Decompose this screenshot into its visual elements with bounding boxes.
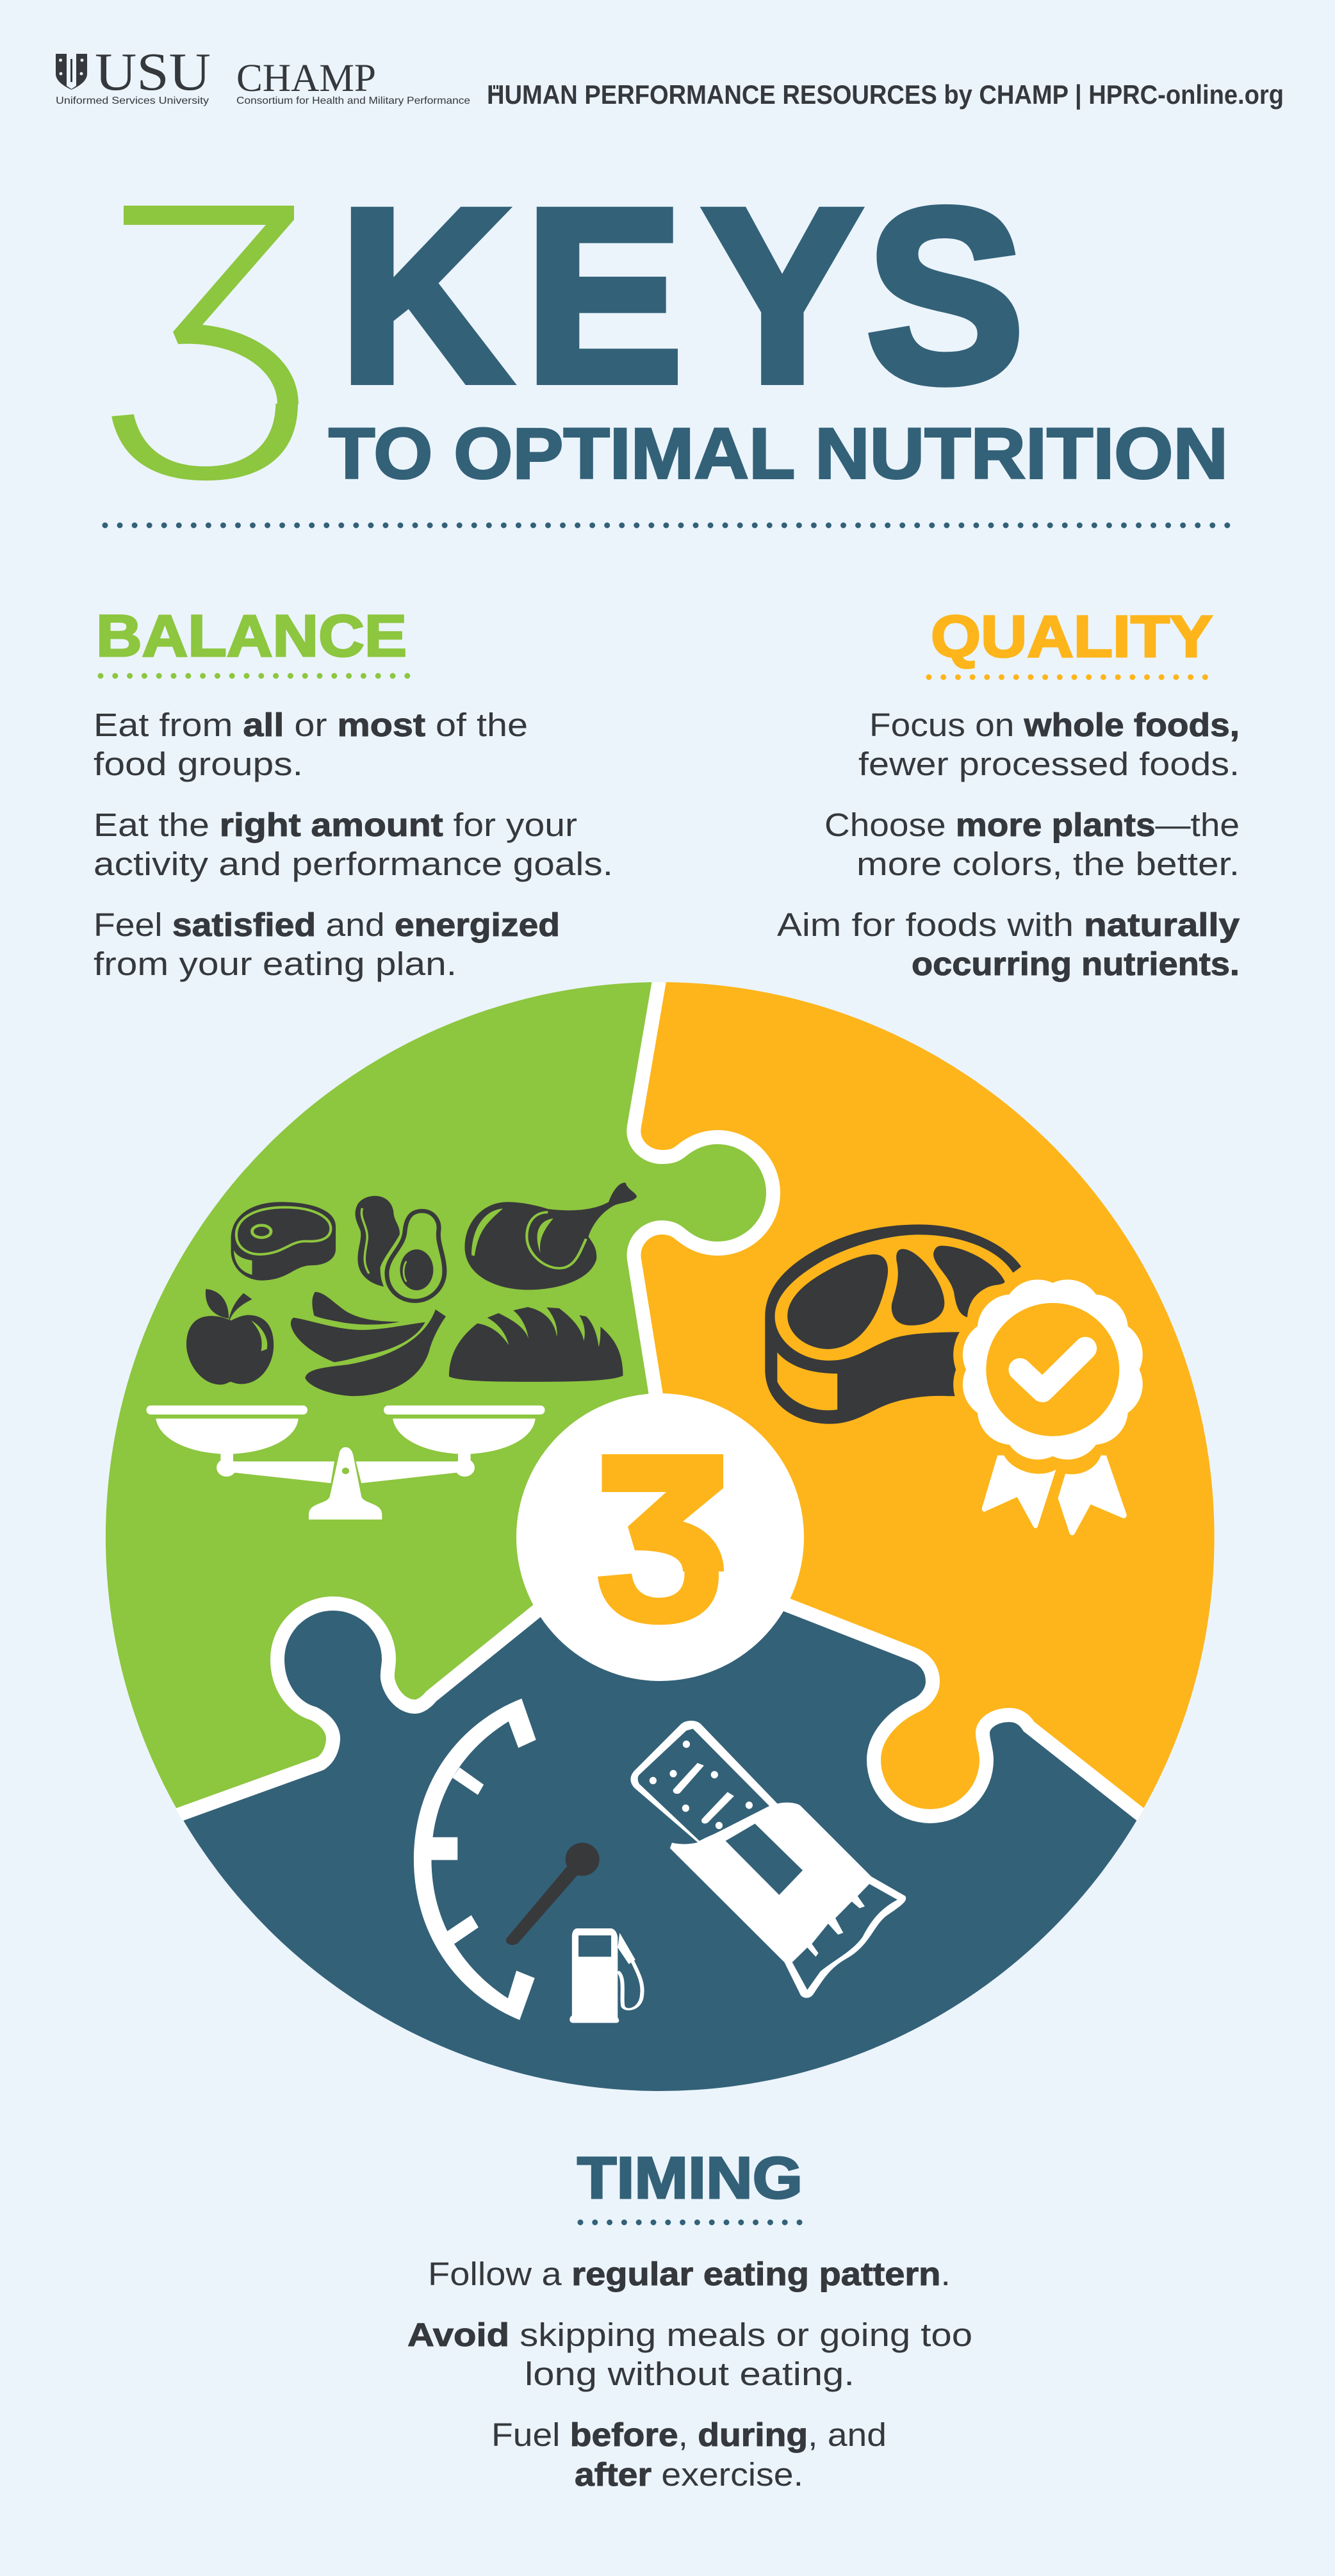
icon group: timing [414,1698,906,2023]
subtitle: to optimal nutrition: TO OPTIMAL NUTRITION [329,414,1228,493]
icon: fuel pump [569,1928,643,2023]
balance point 3: Feel satisfied and energized [94,907,560,943]
logo: Uniformed Services University [56,42,211,106]
logo: CHAMP: Consortium for Health and Military Performance [236,95,470,106]
timing point 1: Follow a regular eating pattern . [428,2256,951,2292]
logo: CHAMP [236,57,470,106]
heading: balance: BALANCE [96,603,407,669]
puzzle piece: timing [180,1589,1140,2091]
balance point 1: Eat from all or most of the [94,707,528,743]
heading: timing: TIMING [577,2145,803,2211]
quality point 1: Focus on whole foods, [869,707,1240,743]
icon: bananas [291,1292,446,1396]
icon: nut [356,1196,400,1286]
quality point 3: occurring nutrients. [912,946,1240,982]
title numeral 3 [111,206,299,480]
panel: quality text [777,604,1240,982]
heading: quality: QUALITY [931,604,1213,669]
balance point 1: food groups. [94,746,303,782]
title: KEYS: KEYS [340,158,1024,433]
logo: Uniformed Services University: USU [95,42,211,102]
quality point 2 [824,807,1240,882]
icon: balance scale [147,1406,545,1520]
timing point 2 [407,2317,972,2392]
puzzle wheel [106,977,1215,2091]
balance point 3 [94,907,560,982]
centre numeral 3 [598,1454,724,1625]
timing point 3: after exercise. [575,2456,803,2493]
title numeral 3: 3 [85,94,325,577]
timing point 2: long without eating. [525,2356,855,2392]
icon group: food groups [147,1183,637,1520]
quality point 1: fewer processed foods. [858,746,1240,782]
quality point 2: more colors, the better. [856,846,1240,882]
icon: steak cross-section [765,1224,1021,1424]
timing point 3: Fuel before , during , and [491,2416,887,2453]
puzzle piece: quality [634,982,1215,1816]
icon: bread [449,1307,623,1382]
timing point 2: Avoid skipping meals or going too [407,2317,972,2353]
icon: roast chicken [464,1183,637,1290]
balance point 2: activity and performance goals. [94,846,613,882]
panel: timing text [407,2145,972,2493]
logo: Uniformed Services University: Uniformed Services University [56,95,209,106]
quality point 2: Choose more plants —the [824,807,1240,843]
quality point 3 [777,907,1240,982]
timing point 3 [491,2416,887,2493]
icon: avocado [387,1211,445,1301]
quality point 1 [858,707,1240,782]
centre numeral 3: 3 [592,1402,728,1674]
icon group: quality food [765,1224,1143,1535]
icon: fuel gauge [414,1698,600,2020]
centre circle [516,1393,804,1681]
icon: energy bar [630,1721,906,1998]
puzzle piece: balance [106,982,773,1814]
logo: CHAMP: CHAMP [236,57,376,100]
balance point 2 [94,807,613,882]
balance point 1 [94,707,528,782]
quality point 3: Aim for foods with naturally [777,907,1240,943]
icon: steak [231,1202,336,1281]
panel: balance text [94,603,613,982]
balance point 2: Eat the right amount for your [94,807,577,843]
icon: ribbon award [963,1279,1143,1535]
balance point 3: from your eating plan. [94,946,457,982]
icon: apple [186,1289,274,1384]
